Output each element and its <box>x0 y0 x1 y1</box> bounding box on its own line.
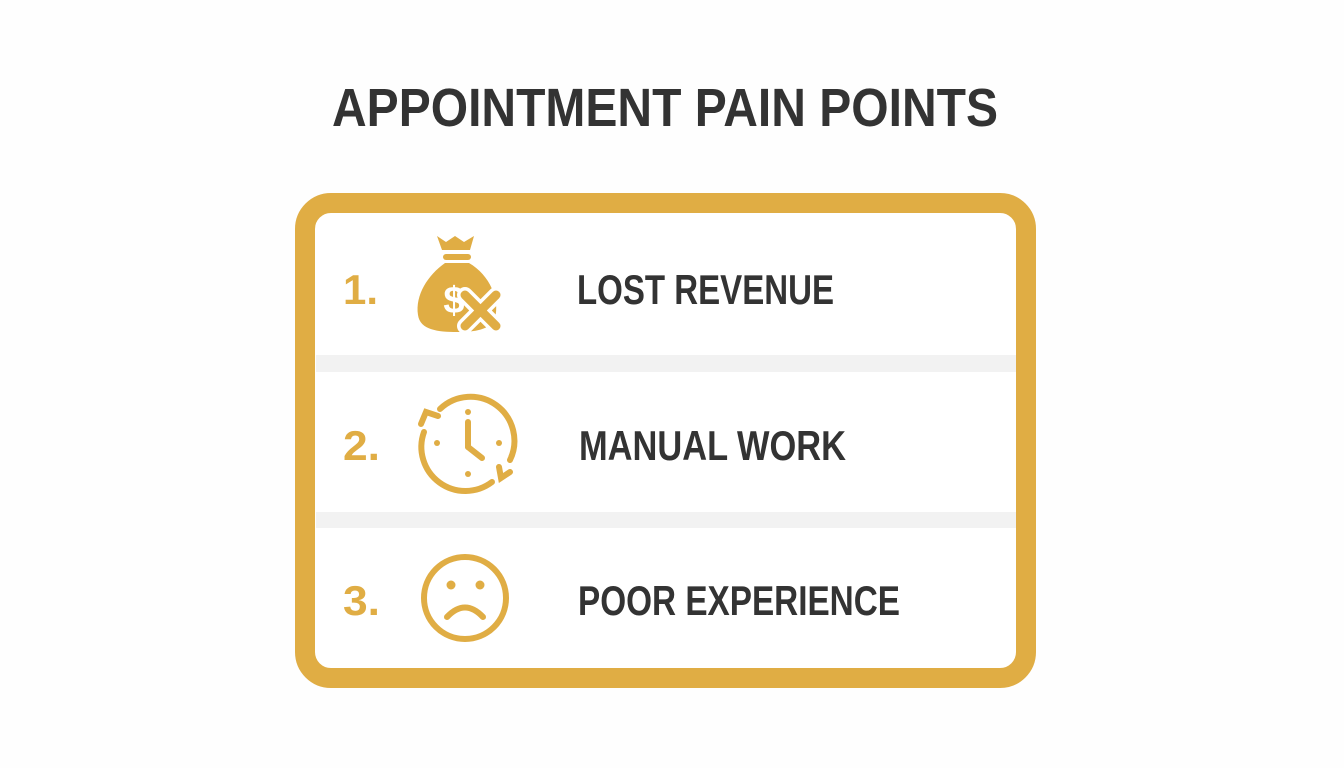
row 1: lost revenue: 1. <box>343 266 378 313</box>
icon: sad face <box>424 557 506 639</box>
row 3: poor experience: 3. <box>343 577 380 624</box>
panel: pain points list <box>305 203 1026 678</box>
row 1: lost revenue <box>343 236 834 332</box>
row 3: poor experience <box>343 557 900 639</box>
row 3: poor experience: POOR EXPERIENCE <box>578 577 900 624</box>
row 1: lost revenue: LOST REVENUE <box>577 266 834 313</box>
icon: clock with arrows <box>421 397 514 491</box>
row 2: manual work: MANUAL WORK <box>579 422 846 469</box>
title: APPOINTMENT PAIN POINTS <box>332 78 998 138</box>
row 2: manual work: 2. <box>343 422 380 469</box>
icon: money bag with x: $ <box>443 280 465 322</box>
row 2: manual work <box>343 397 846 491</box>
icon: money bag with x <box>418 236 496 332</box>
